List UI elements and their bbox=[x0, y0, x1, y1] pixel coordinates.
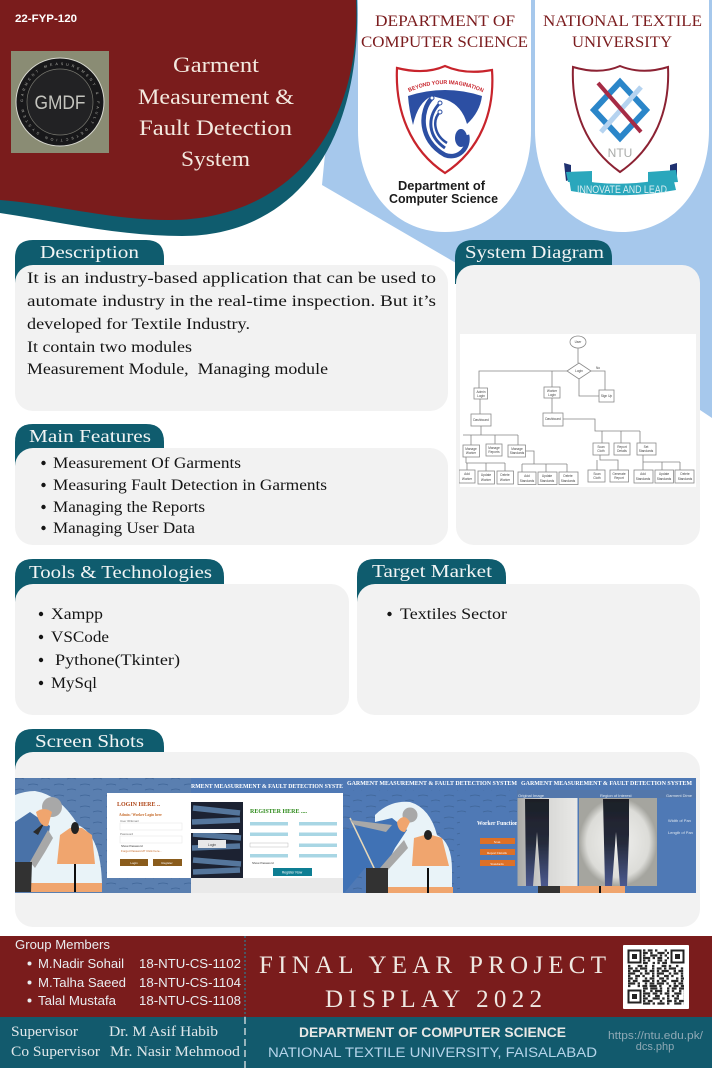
icon: GMDF logo: GMDF bbox=[34, 93, 86, 114]
icon: GMDF logo: GARMENT MEASUREMENT & FAULT DETECTION SYSTEM bbox=[20, 62, 100, 142]
screenshot: login: Register bbox=[161, 861, 173, 865]
title: System bbox=[181, 146, 250, 171]
flowchart nodes: Manage bbox=[488, 446, 500, 450]
screenshot: login bbox=[15, 778, 191, 893]
project id: 22-FYP-120 bbox=[15, 13, 77, 25]
light blue background band bbox=[322, 0, 712, 418]
icon: QR code bbox=[623, 945, 689, 1009]
flowchart bbox=[459, 334, 696, 487]
screenshot: worker functions: Worker Function bbox=[477, 821, 519, 827]
header teal wave bbox=[0, 0, 357, 236]
screenshot: login: LOGIN HERE .. bbox=[117, 802, 161, 808]
screenshot: register bbox=[191, 778, 343, 893]
title: Measurement & bbox=[138, 84, 294, 109]
screenshot: login: Admin / Worker Login here bbox=[119, 813, 162, 817]
heading: main features: Main Features bbox=[29, 426, 151, 446]
panel: screen shots bbox=[15, 729, 700, 927]
description text: automate industry in the real-time inspection. But it’s bbox=[27, 293, 436, 310]
group members: Group Members bbox=[15, 937, 111, 952]
features list: Measurement Of Garments bbox=[53, 455, 241, 472]
footer title: DISPLAY 2022 bbox=[325, 986, 542, 1013]
screenshot: register: REGISTER HERE .... bbox=[250, 809, 308, 815]
target list: Textiles Sector bbox=[400, 606, 508, 623]
flowchart nodes: Add bbox=[524, 474, 530, 478]
description text bbox=[27, 270, 436, 378]
flowchart nodes: Update bbox=[542, 474, 552, 478]
features list: Managing the Reports bbox=[53, 499, 205, 516]
department caption: Department of bbox=[398, 178, 486, 193]
group members: 18-NTU-CS-1104 bbox=[139, 975, 241, 990]
group members: M.Nadir Sohail bbox=[38, 956, 124, 971]
flowchart nodes: Worker bbox=[466, 451, 477, 455]
footer: teal band bbox=[0, 1017, 712, 1068]
screenshot: register: Login bbox=[208, 843, 216, 847]
screenshot: worker functions: Scan bbox=[494, 840, 501, 844]
university heading: UNIVERSITY bbox=[572, 34, 672, 51]
icon: GMDF logo bbox=[11, 51, 109, 153]
supervisors: Mr. Nasir Mehmood bbox=[110, 1044, 241, 1060]
panel: description bbox=[15, 240, 448, 411]
group members: Talal Mustafa bbox=[38, 993, 117, 1008]
title bbox=[138, 52, 294, 171]
node: user: User bbox=[575, 340, 582, 344]
flowchart nodes: Standards bbox=[510, 451, 525, 455]
screenshot: register: Register Now bbox=[282, 870, 303, 874]
heading: screen shots: Screen Shots bbox=[35, 731, 144, 751]
flowchart nodes: Worker bbox=[500, 478, 511, 482]
header panel: department capsule bbox=[358, 0, 531, 232]
flowchart nodes: Set bbox=[644, 445, 649, 449]
flowchart nodes: Worker bbox=[462, 477, 473, 481]
screenshot: login: Show Password bbox=[121, 844, 143, 848]
heading: target market: Target Market bbox=[372, 561, 492, 581]
flowchart nodes: Report bbox=[614, 476, 624, 480]
tools list: VSCode bbox=[51, 629, 109, 646]
department heading: DEPARTMENT OF bbox=[375, 13, 515, 30]
supervisors bbox=[11, 1024, 241, 1060]
flowchart nodes: Reports bbox=[488, 450, 500, 454]
website url bbox=[608, 1030, 704, 1053]
tools list: MySql bbox=[51, 675, 98, 692]
screenshot: login: User ID/Email bbox=[120, 819, 139, 823]
heading: description: Description bbox=[40, 242, 139, 262]
ribbon: INNOVATE AND LEAD bbox=[577, 184, 667, 196]
tools list: Pythone(Tkinter) bbox=[55, 652, 180, 669]
flowchart nodes: Manage bbox=[465, 447, 477, 451]
screenshot: register: Show Password bbox=[252, 861, 274, 865]
website url: https://ntu.edu.pk/ bbox=[608, 1030, 704, 1042]
flowchart nodes: Standards bbox=[520, 479, 535, 483]
panel: tools and technologies bbox=[15, 559, 349, 715]
flowchart nodes: Cloth bbox=[593, 476, 601, 480]
node: user bbox=[570, 336, 586, 348]
flowchart nodes: Cloth bbox=[597, 449, 605, 453]
supervisors: Co Supervisor bbox=[11, 1044, 100, 1060]
flowchart nodes: Manage bbox=[511, 447, 523, 451]
flowchart nodes: Scan bbox=[593, 472, 601, 476]
screenshot: measurement: Original Image bbox=[518, 793, 545, 798]
tools list: Xampp bbox=[51, 606, 103, 623]
flowchart nodes: Delete bbox=[563, 474, 573, 478]
tools list bbox=[39, 606, 180, 692]
screenshot: worker functions: GARMENT MEASUREMENT & FAULT DETECTION SYSTEM bbox=[347, 780, 517, 787]
features list: Measuring Fault Detection in Garments bbox=[53, 477, 327, 494]
supervisors: Dr. M Asif Habib bbox=[109, 1024, 218, 1040]
department caption bbox=[389, 178, 498, 206]
screenshot: measurement bbox=[517, 778, 696, 893]
heading: tools and technologies: Tools & Technologies bbox=[29, 562, 212, 582]
icon: university shield: NTU bbox=[608, 146, 632, 160]
flowchart nodes: Worker bbox=[547, 389, 558, 393]
flowchart nodes: Update bbox=[481, 473, 491, 477]
flowchart nodes: Generate bbox=[612, 472, 626, 476]
flowchart nodes: Details bbox=[617, 449, 627, 453]
header panel: university capsule bbox=[535, 0, 709, 232]
screenshot: measurement: Length of Pan bbox=[668, 830, 693, 835]
flowchart nodes: Dashboard bbox=[545, 417, 561, 421]
header maroon wave bbox=[0, 0, 356, 220]
footer department text: NATIONAL TEXTILE UNIVERSITY, FAISALABAD bbox=[268, 1045, 597, 1060]
flowchart nodes: Standards bbox=[540, 479, 555, 483]
flowchart nodes: Admin bbox=[476, 390, 486, 394]
department caption: Computer Science bbox=[389, 191, 498, 206]
footer title: FINAL YEAR PROJECT bbox=[259, 952, 606, 979]
department heading bbox=[361, 13, 528, 51]
group members: M.Talha Saeed bbox=[38, 975, 126, 990]
footer department text bbox=[268, 1025, 597, 1060]
node: login: No bbox=[596, 366, 600, 370]
screenshot: measurement: Region of Interest bbox=[600, 793, 632, 798]
title: Fault Detection bbox=[139, 115, 292, 140]
features list bbox=[41, 455, 327, 537]
description text: It is an industry-based application that can be used to bbox=[27, 270, 436, 287]
university heading: NATIONAL TEXTILE bbox=[543, 13, 702, 30]
description text: developed for Textile Industry. bbox=[27, 316, 250, 333]
flowchart nodes: Standards bbox=[657, 477, 672, 481]
flowchart nodes: Delete bbox=[500, 473, 510, 477]
screenshot: measurement: GARMENT MEASUREMENT & FAULT DETECTION SYSTEM bbox=[521, 780, 692, 787]
screenshot: login: Password bbox=[120, 832, 134, 836]
screenshot: register: RMENT MEASUREMENT & FAULT DETECTION SYSTE bbox=[191, 783, 343, 790]
flowchart nodes: Standards bbox=[636, 477, 651, 481]
flowchart nodes: Report bbox=[617, 445, 627, 449]
title: Garment bbox=[173, 52, 259, 77]
screenshot: measurement: Garment Dime bbox=[666, 793, 693, 798]
screenshot: measurement: Width of Pan bbox=[668, 818, 691, 823]
description text: Measurement Module, Managing module bbox=[27, 361, 328, 378]
screenshot: worker functions bbox=[343, 778, 519, 893]
footer divider bbox=[244, 936, 246, 1017]
flowchart nodes: Standards bbox=[561, 479, 576, 483]
icon: department shield: BEYOND YOUR IMAGINATION bbox=[408, 80, 484, 92]
flowchart nodes: Scan bbox=[597, 445, 605, 449]
university heading bbox=[543, 13, 702, 51]
screenshot: login: Forgot Password? Click here... bbox=[121, 849, 162, 853]
flowchart nodes: Dashboard bbox=[473, 418, 489, 422]
panel: target market bbox=[357, 559, 700, 715]
description text: It contain two modules bbox=[27, 339, 192, 356]
features list: Managing User Data bbox=[53, 520, 195, 537]
flowchart nodes: Worker bbox=[481, 478, 492, 482]
flowchart nodes: Add bbox=[464, 472, 470, 476]
panel: main features bbox=[15, 424, 448, 545]
screenshot: worker functions: Report Details bbox=[487, 851, 508, 855]
footer title bbox=[259, 952, 606, 1013]
flowchart nodes: Update bbox=[659, 472, 669, 476]
icon: department shield bbox=[396, 64, 494, 174]
flowchart nodes: Sign Up bbox=[601, 394, 612, 398]
supervisors: Supervisor bbox=[11, 1024, 78, 1040]
flowchart nodes bbox=[459, 387, 694, 484]
group members bbox=[15, 937, 241, 1008]
panel: system diagram bbox=[455, 240, 700, 545]
flowchart nodes: Login bbox=[548, 393, 556, 397]
node: login bbox=[567, 363, 600, 379]
flowchart nodes: Add bbox=[640, 472, 646, 476]
website url: dcs.php bbox=[636, 1041, 674, 1053]
group members: 18-NTU-CS-1108 bbox=[139, 993, 241, 1008]
screenshot: worker functions: Standards bbox=[490, 862, 504, 866]
node: login: Login bbox=[575, 369, 583, 373]
flowchart nodes: Standards bbox=[639, 449, 654, 453]
icon: university shield bbox=[564, 66, 678, 196]
screenshot: login: Login bbox=[130, 861, 138, 865]
flowchart nodes: Delete bbox=[680, 472, 690, 476]
flowchart nodes: Login bbox=[477, 394, 485, 398]
footer: maroon band bbox=[0, 936, 712, 1017]
department heading: COMPUTER SCIENCE bbox=[361, 34, 528, 51]
flowchart nodes: Standards bbox=[678, 477, 693, 481]
heading: system diagram: System Diagram bbox=[465, 242, 604, 262]
footer department text: DEPARTMENT OF COMPUTER SCIENCE bbox=[299, 1025, 566, 1040]
group members: 18-NTU-CS-1102 bbox=[139, 956, 241, 971]
